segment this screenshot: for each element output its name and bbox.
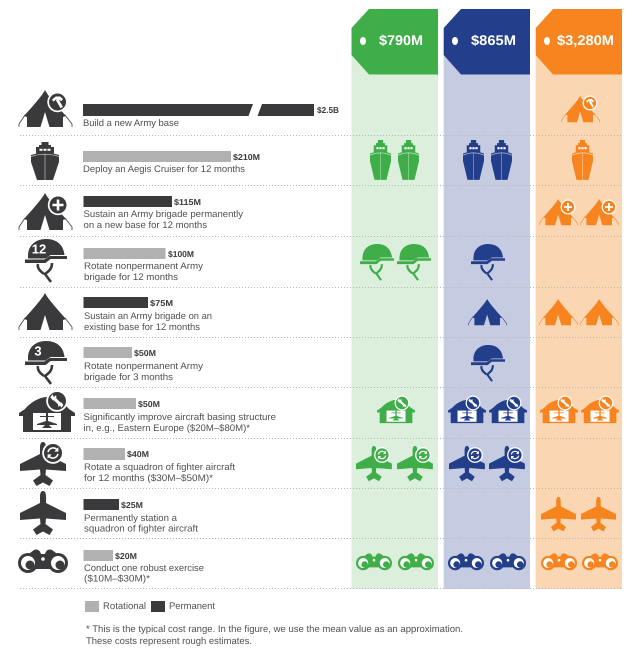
description line 2: in, e.g., Eastern Europe ($20M–$80M)* (84, 423, 250, 434)
icon: hangar with wrench (19, 390, 75, 432)
icons: blue hangars (448, 396, 527, 423)
bar: $2.5B broken (83, 104, 314, 116)
value: $50M (138, 399, 160, 409)
row: deploy an Aegis Cruiser (31, 142, 260, 180)
icons: green cruisers (370, 140, 419, 180)
price tag: $865M: $865M (471, 32, 516, 48)
value: $75M (150, 298, 173, 308)
icons: orange hangars (540, 396, 619, 423)
description: Permanently station a (84, 513, 178, 524)
icon: orange tent with hammer (562, 96, 599, 122)
icon: aircraft (20, 491, 66, 535)
row: rotate fighter squadron (20, 442, 235, 486)
icons: blue binoculars (448, 553, 526, 570)
icon: helmet 3: 3 (34, 344, 42, 358)
row: improve aircraft basing (19, 390, 276, 434)
icon: tent with plus (19, 193, 72, 230)
legend (85, 601, 215, 612)
footnote (86, 624, 463, 647)
icon: blue helmet 12 months (471, 244, 505, 280)
bar: $20M (84, 550, 113, 561)
icon: helmet 3 (25, 341, 67, 384)
price tag: $3,280M (536, 9, 622, 74)
bar: $50M (84, 398, 136, 409)
icons: blue cruisers (463, 140, 512, 180)
description line 2: existing base for 12 months (84, 322, 200, 333)
row: rotate brigade 3 months (25, 341, 203, 384)
description: Conduct one robust exercise (84, 563, 204, 574)
bar: $25M (84, 499, 119, 510)
description line 2: brigade for 12 months (84, 272, 178, 283)
description line 2: squadron of fighter aircraft (84, 524, 198, 534)
panel: blue option $865M (444, 9, 530, 589)
row: station fighter squadron (20, 491, 198, 535)
price tag: $790M (352, 9, 438, 74)
value: $115M (174, 197, 201, 207)
bar: $210M (83, 151, 231, 162)
legend: Permanent (169, 601, 215, 612)
description: Build a new Army base (83, 118, 179, 129)
footnote: * This is the typical cost range. In the figure, we use the mean value as an approximation. (86, 624, 463, 635)
value: $100M (168, 249, 194, 259)
icons: orange aircraft (541, 497, 616, 531)
icons: green helmets (360, 244, 431, 280)
icon: tent with hammer (19, 90, 72, 127)
icon: orange cruiser (572, 140, 593, 180)
value: $20M (115, 551, 137, 561)
description line 2: on a new base for 12 months (84, 220, 207, 231)
value: $2.5B (317, 105, 339, 115)
bar: $100M (84, 248, 166, 259)
row: sustain brigade on existing base (19, 293, 212, 333)
description: Sustain an Army brigade on an (84, 311, 212, 322)
icons: orange tents (540, 299, 618, 325)
row: sustain brigade on new base (19, 193, 243, 231)
description: Rotate a squadron of fighter aircraft (84, 462, 235, 473)
footnote: These costs represent rough estimates. (86, 636, 252, 647)
description: Rotate nonpermanent Army (84, 261, 203, 272)
value: $50M (134, 348, 156, 358)
icon: tent (19, 293, 72, 330)
price tag: $790M: $790M (379, 32, 423, 48)
icon: blue helmet 3 months (471, 345, 505, 381)
value: $210M (233, 152, 260, 162)
description line 2: brigade for 3 months (84, 372, 173, 383)
panel: orange option $3,280M (536, 9, 622, 589)
icon: helmet 12: 12 (32, 242, 46, 256)
panel: green option $790M (352, 9, 438, 589)
icon: blue tent (469, 299, 506, 325)
icons: blue rotating aircraft (449, 446, 525, 481)
description: Rotate nonpermanent Army (84, 361, 203, 372)
icon: helmet 12 (25, 239, 67, 282)
description: Significantly improve aircraft basing structure (84, 412, 276, 423)
bar: $75M (84, 297, 148, 308)
bar: $40M (84, 448, 125, 460)
icons: green rotating aircraft (356, 446, 433, 481)
legend: Rotational (103, 601, 146, 612)
price tag: $865M (444, 9, 530, 74)
row: robust exercise (18, 549, 204, 584)
value: $40M (127, 449, 149, 459)
description: Deploy an Aegis Cruiser for 12 months (83, 164, 245, 175)
row: rotate brigade 12 months (25, 239, 203, 283)
icon: binoculars (18, 549, 68, 573)
icons: orange binoculars (541, 553, 618, 570)
icons: green binoculars (356, 553, 434, 570)
description line 2: ($10M–$30M)* (84, 574, 150, 584)
row: build a new Army base (19, 90, 339, 129)
price tag: $3,280M: $3,280M (557, 32, 614, 48)
value: $25M (121, 500, 143, 510)
bar: $50M (84, 347, 132, 358)
icon: ship (31, 142, 59, 180)
description line 2: for 12 months ($30M–$50M)* (84, 473, 213, 484)
icon: green hangar (377, 396, 415, 423)
icon: aircraft with refresh (20, 442, 66, 486)
icons: orange tents with plus (540, 199, 618, 225)
description: Sustain an Army brigade permanently (84, 209, 243, 220)
bar: $115M (84, 196, 172, 207)
